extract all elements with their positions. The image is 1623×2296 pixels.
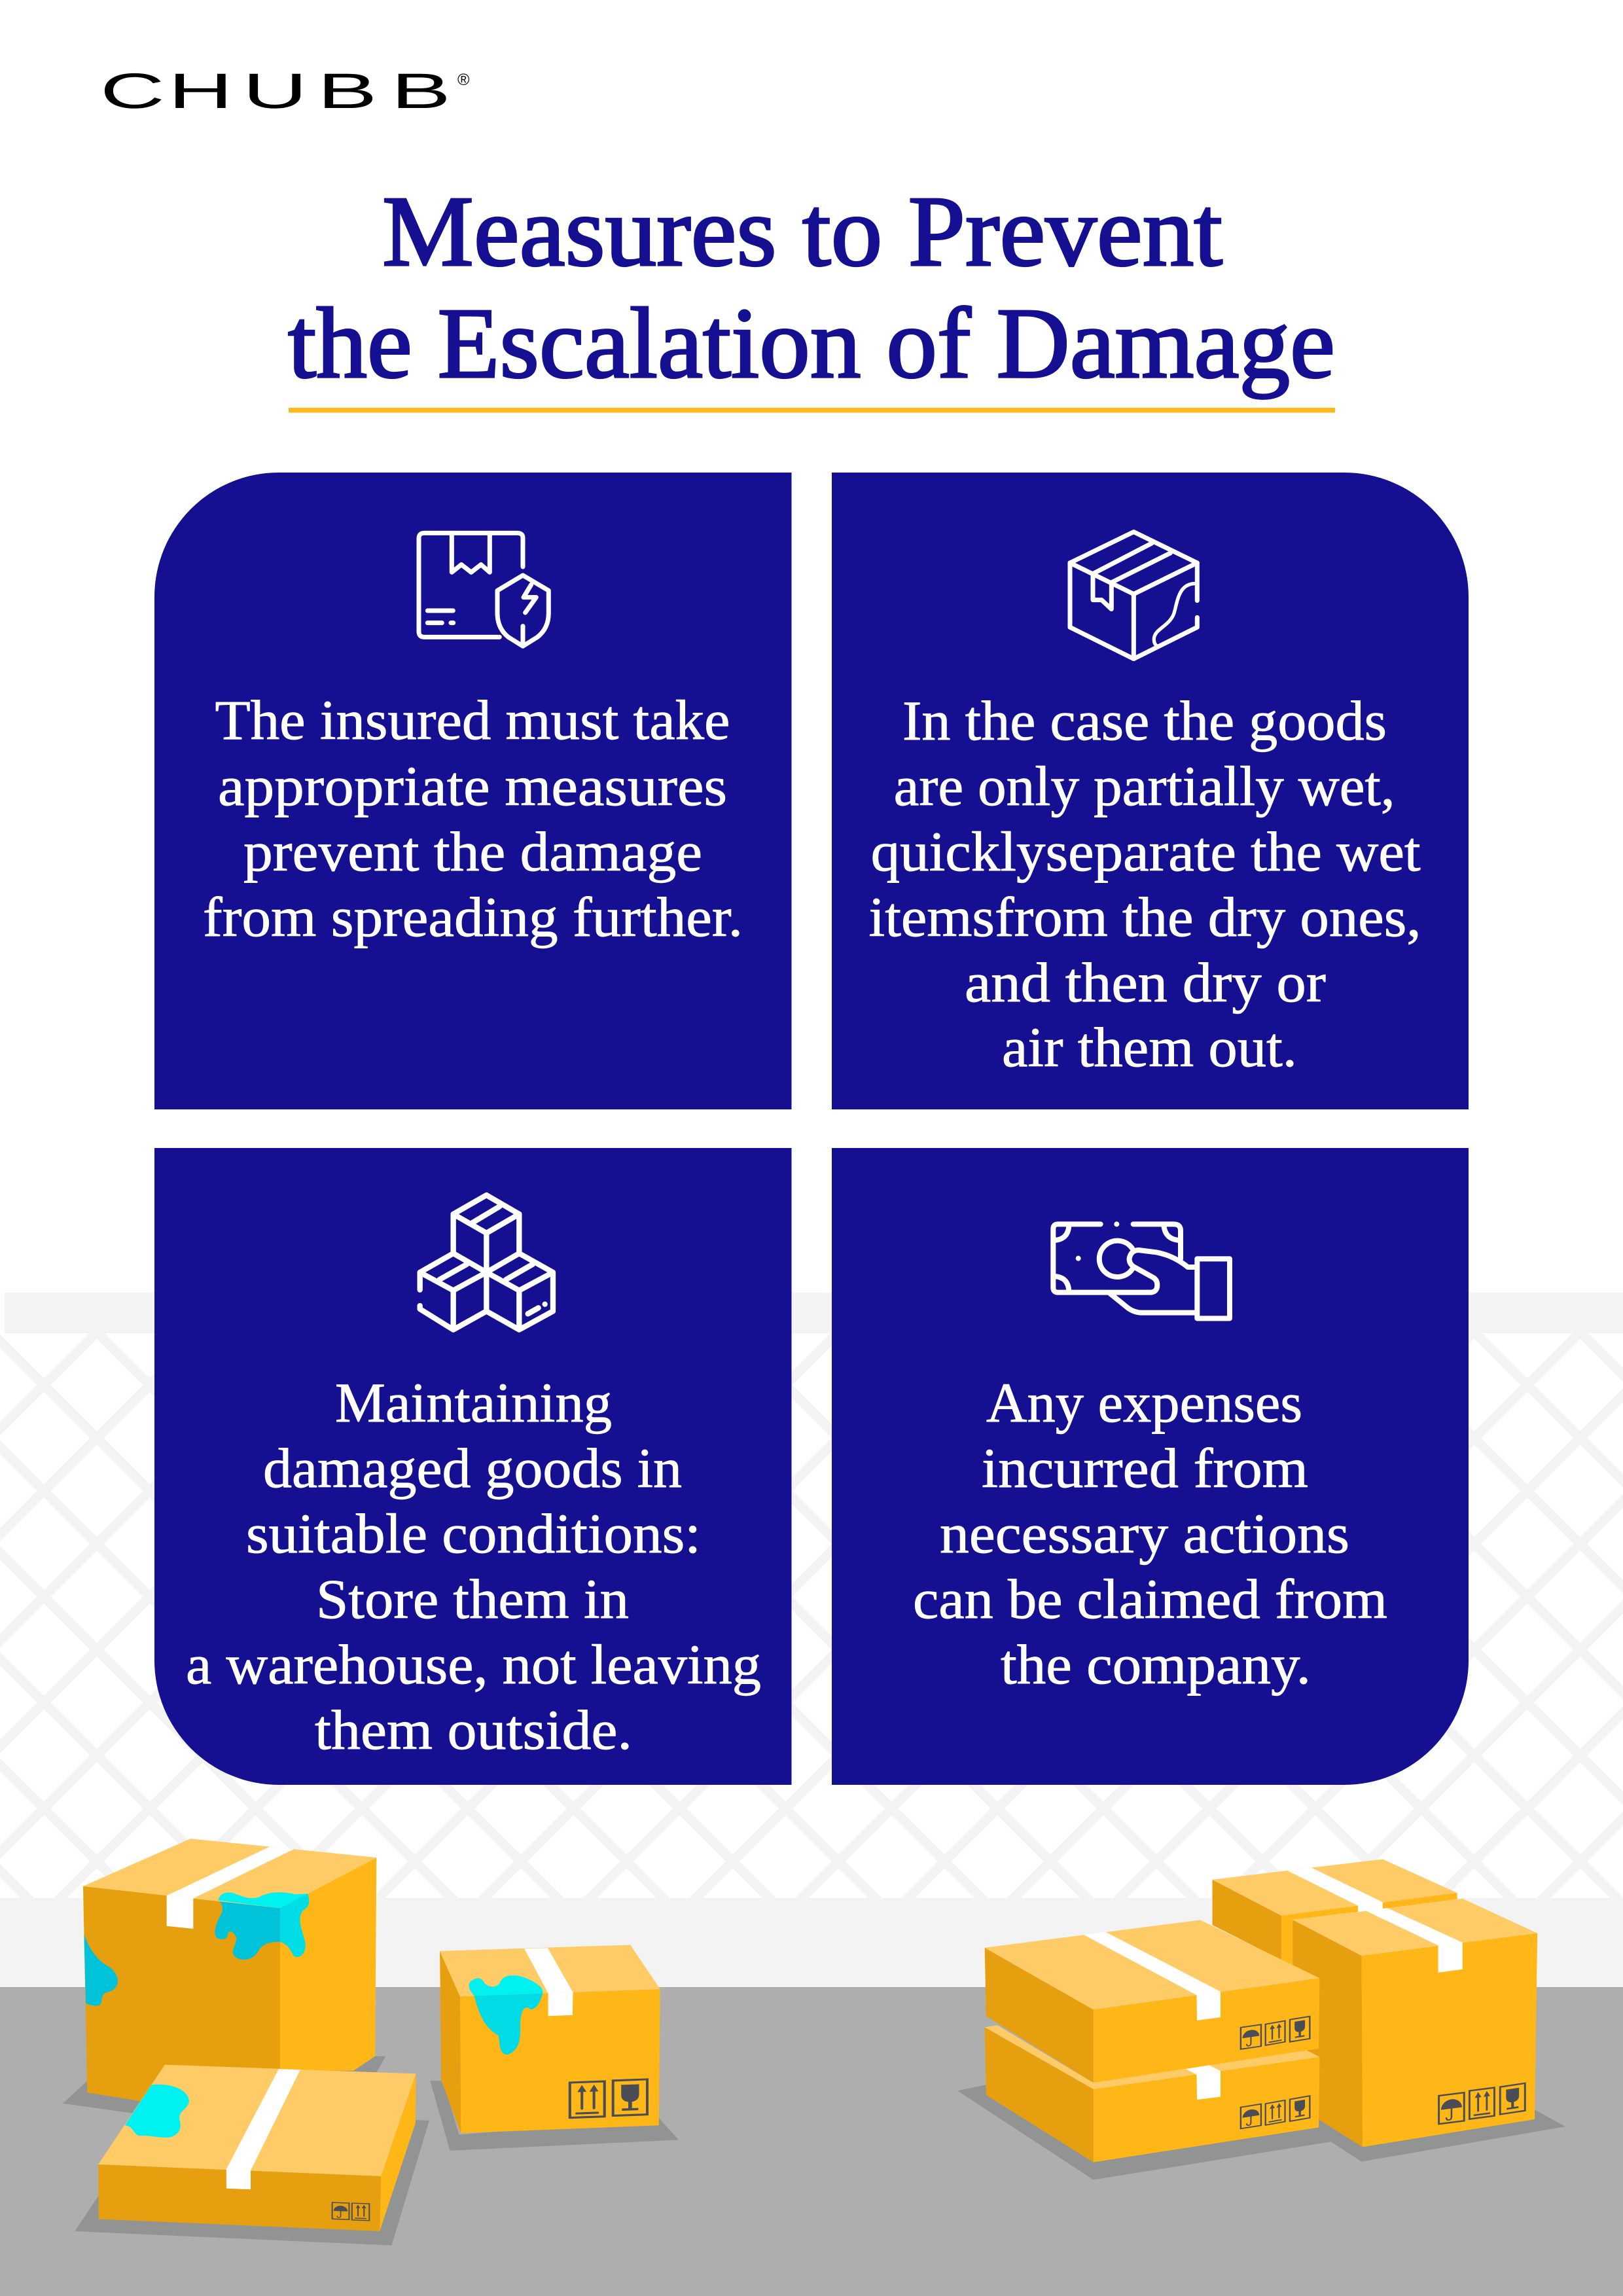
- wet box: flat: [75, 2064, 429, 2246]
- wet box: small: [430, 1945, 679, 2151]
- text block: panel two: itemsfrom the dry ones,: [869, 886, 1421, 948]
- text block: panel one: from spreading further.: [203, 886, 743, 948]
- text block: panel one: The insured must take: [215, 689, 730, 751]
- text block: panel one: appropriate measures: [218, 755, 727, 817]
- text block: panel three: suitable conditions:: [246, 1502, 701, 1565]
- logo: Chubb wordmark: CHUBB: [100, 63, 451, 118]
- text block: panel three: [186, 1371, 761, 1761]
- text block: panel two: are only partially wet,: [894, 755, 1395, 817]
- icon: damaged box: [1070, 532, 1197, 659]
- text block: panel three: them outside.: [315, 1698, 632, 1761]
- stack: upper box: [985, 1920, 1319, 2083]
- text block: panel four: necessary actions: [940, 1502, 1349, 1565]
- icon: stacked boxes: [420, 1195, 553, 1330]
- text block: panel three: damaged goods in: [263, 1437, 682, 1499]
- panel: maintain damaged goods: [154, 1148, 792, 1785]
- text block: panel one: prevent the damage: [243, 820, 702, 883]
- wet box: tall: [63, 1839, 385, 2115]
- text block: panel two: and then dry or: [965, 951, 1326, 1014]
- text block: panel two: In the case the goods: [902, 689, 1387, 752]
- text block: panel four: incurred from: [982, 1437, 1308, 1499]
- text block: panel three: a warehouse, not leaving: [186, 1633, 761, 1696]
- text block: panel two: air them out.: [1002, 1016, 1297, 1079]
- text block: panel four: can be claimed from: [913, 1568, 1387, 1630]
- icon: package with shield: [419, 533, 548, 646]
- logo: Chubb wordmark: ®: [457, 71, 470, 89]
- text block: panel two: quicklyseparate the wet: [871, 820, 1421, 883]
- tall box: [1293, 1899, 1537, 2147]
- text block: panel three: Store them in: [316, 1568, 629, 1630]
- icon: hand holding money: [1053, 1224, 1230, 1318]
- text block: panel four: the company.: [1001, 1633, 1311, 1696]
- text block: panel two: [869, 689, 1421, 1079]
- title: Measures to Prevent: [382, 176, 1222, 287]
- back box: [1213, 1859, 1457, 1966]
- title underline: [289, 408, 1335, 412]
- panel: take appropriate measures: [154, 473, 792, 1109]
- title: the Escalation of Damage: [288, 288, 1335, 399]
- illustration: dry stacked boxes right: [957, 1859, 1565, 2179]
- panel: separate wet items: [832, 473, 1469, 1109]
- text block: panel four: Any expenses: [986, 1371, 1302, 1434]
- ground shadow: [957, 2085, 1565, 2179]
- text block: panel one: [203, 689, 743, 948]
- text block: panel three: Maintaining: [335, 1371, 612, 1434]
- panel: claim expenses: [832, 1148, 1469, 1785]
- stack: lower box: [985, 2025, 1319, 2162]
- text block: panel four: [913, 1371, 1387, 1696]
- illustration: wet boxes left: [63, 1839, 679, 2246]
- title: [288, 176, 1335, 399]
